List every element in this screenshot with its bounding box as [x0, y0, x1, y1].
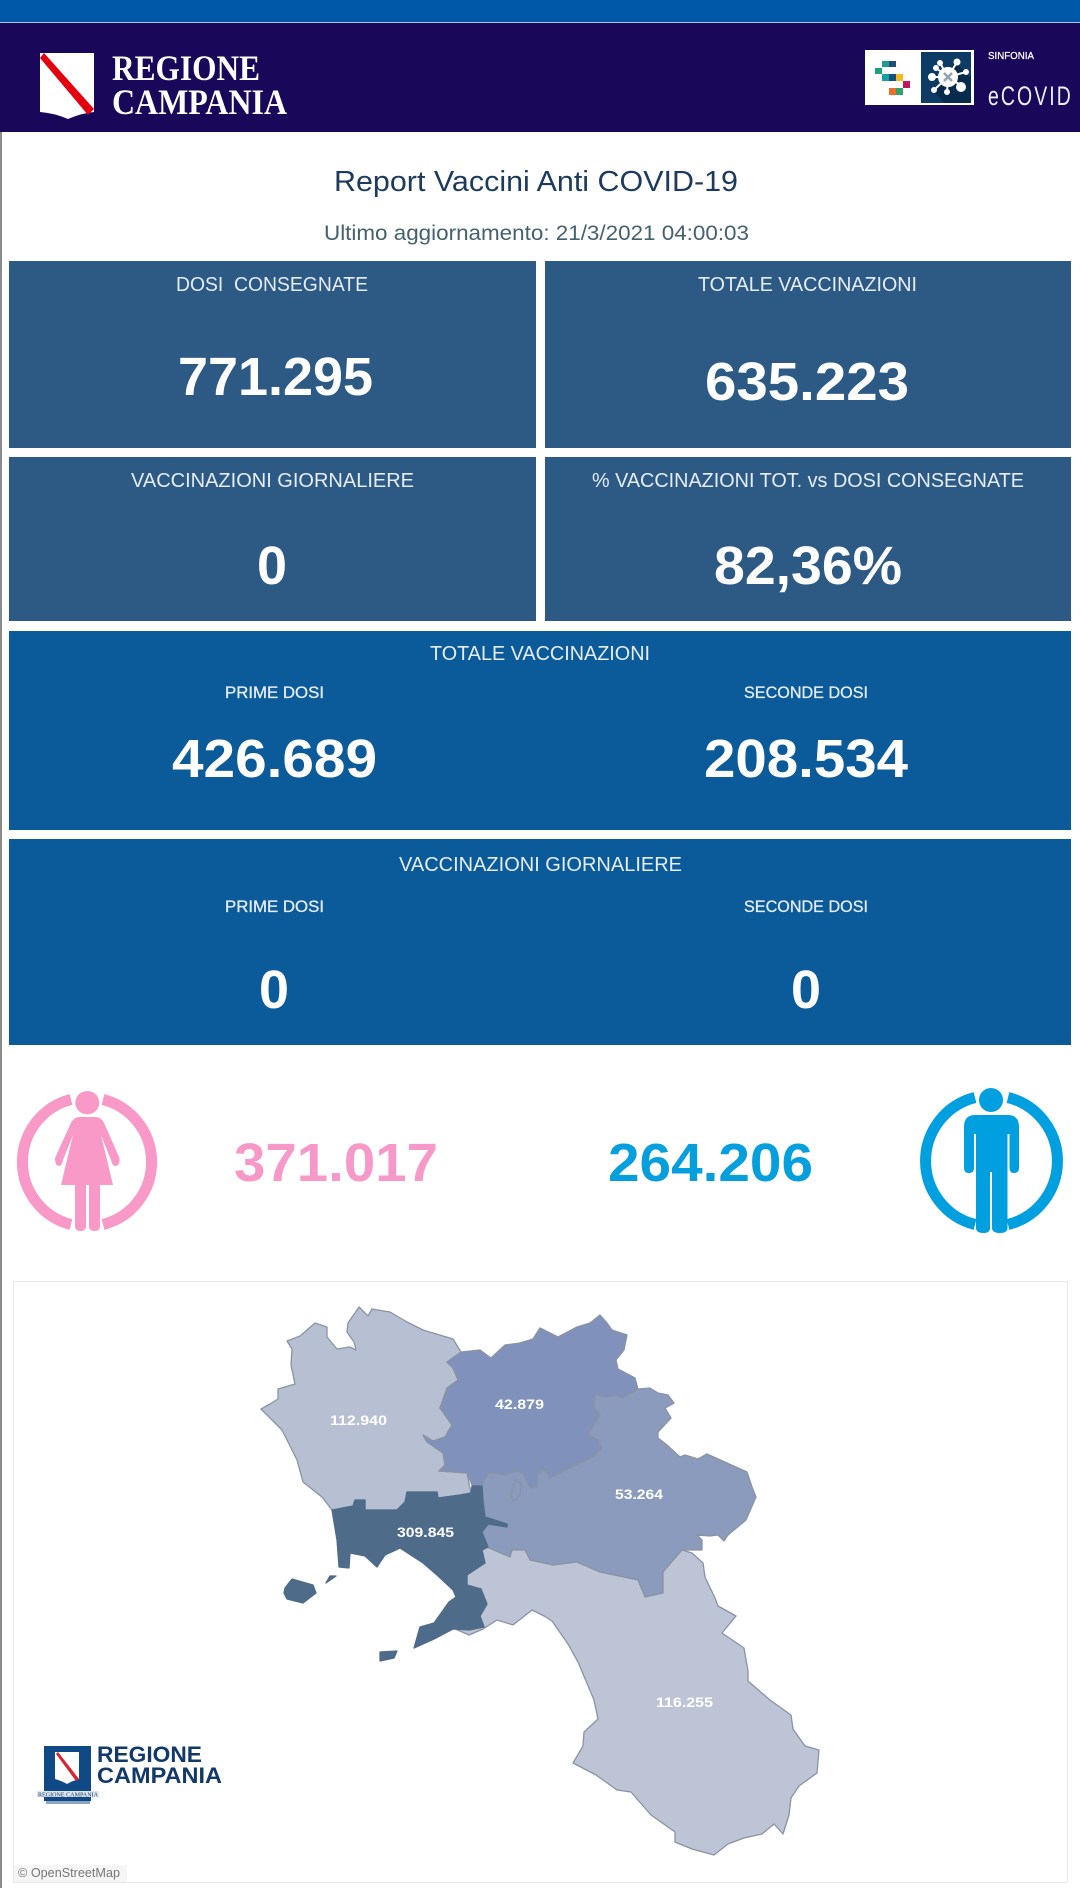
map attribution: © OpenStreetMap: [18, 1865, 120, 1880]
title: Report Vaccini Anti COVID-19: [334, 166, 738, 198]
logo: Regione Campania lower left: REGIONE CAMPANIA: [38, 1792, 99, 1798]
map value: Caserta: 112.940: [330, 1412, 387, 1428]
value: prime dosi: 0: [259, 960, 289, 1020]
panel: percentuale vaccinazioni: [545, 457, 1071, 621]
label: Sinfonia: SINFONIA: [988, 51, 1034, 62]
panel value: 0: [257, 536, 287, 596]
value: seconde dosi: 208.534: [704, 729, 908, 789]
logo: Regione Campania lower left: [37, 1742, 222, 1804]
panel: dosi consegnate: [9, 261, 536, 448]
label: prime dosi: PRIME DOSI: [225, 897, 324, 916]
logo wordmark: [112, 48, 287, 122]
header banner: [0, 23, 1080, 132]
province: Avellino: [480, 1388, 756, 1597]
value: prime dosi: 426.689: [172, 729, 377, 789]
panel label: VACCINAZIONI GIORNALIERE: [131, 470, 414, 492]
panel label: % VACCINAZIONI TOT. vs DOSI CONSEGNATE: [592, 470, 1024, 492]
label: seconde dosi: SECONDE DOSI: [744, 897, 868, 916]
label: prime dosi: PRIME DOSI: [225, 683, 324, 702]
panel: map of Campania: [14, 1282, 1068, 1882]
last update timestamp: Ultimo aggiornamento: 21/3/2021 04:00:03: [324, 222, 749, 245]
logo wordmark: REGIONE: [112, 48, 260, 88]
map value: Benevento: 42.879: [495, 1396, 544, 1412]
map value: Napoli: 309.845: [397, 1524, 454, 1540]
map value: Salerno: 116.255: [656, 1694, 713, 1710]
icon: male figure: [926, 1088, 1057, 1233]
lake: [511, 1480, 521, 1501]
panel value: 771.295: [178, 347, 373, 407]
icon: female figure: [22, 1091, 152, 1231]
panel value: 82,36%: [714, 536, 902, 596]
province: Salerno: [453, 1547, 819, 1855]
logo: Sinfonia eCOVID icon: [865, 50, 974, 105]
province: Napoli: [284, 1486, 507, 1661]
panel: vaccinazioni giornaliere: [9, 457, 536, 621]
panel: totale vaccinazioni: [545, 261, 1071, 448]
label: seconde dosi: SECONDE DOSI: [744, 683, 868, 702]
logo: Regione Campania shield: [40, 53, 94, 119]
label: eCOVID: eCOVID: [988, 81, 1071, 111]
map provinces: [261, 1307, 819, 1855]
panel label: TOTALE VACCINAZIONI: [698, 274, 917, 296]
panel: totale vaccinazioni prime e seconde dosi: [9, 631, 1071, 830]
logo: Regione Campania lower left: CAMPANIA: [97, 1763, 222, 1788]
panel heading: VACCINAZIONI GIORNALIERE: [399, 854, 682, 876]
map value: Avellino: 53.264: [615, 1486, 663, 1502]
panel label: DOSI CONSEGNATE: [176, 274, 368, 296]
province: Caserta: [261, 1307, 471, 1510]
logo: Regione Campania lower left: REGIONE: [97, 1742, 202, 1767]
top blue bar: [0, 0, 1080, 22]
province: Benevento: [423, 1315, 638, 1488]
panel heading: TOTALE VACCINAZIONI: [430, 643, 650, 665]
value: seconde dosi: 0: [791, 960, 821, 1020]
panel value: 635.223: [705, 352, 909, 412]
value: female vaccinations: 371.017: [234, 1133, 438, 1193]
logo wordmark: CAMPANIA: [112, 82, 287, 122]
panel: vaccinazioni giornaliere prime e seconde dosi: [9, 839, 1071, 1045]
value: male vaccinations: 264.206: [608, 1133, 813, 1193]
